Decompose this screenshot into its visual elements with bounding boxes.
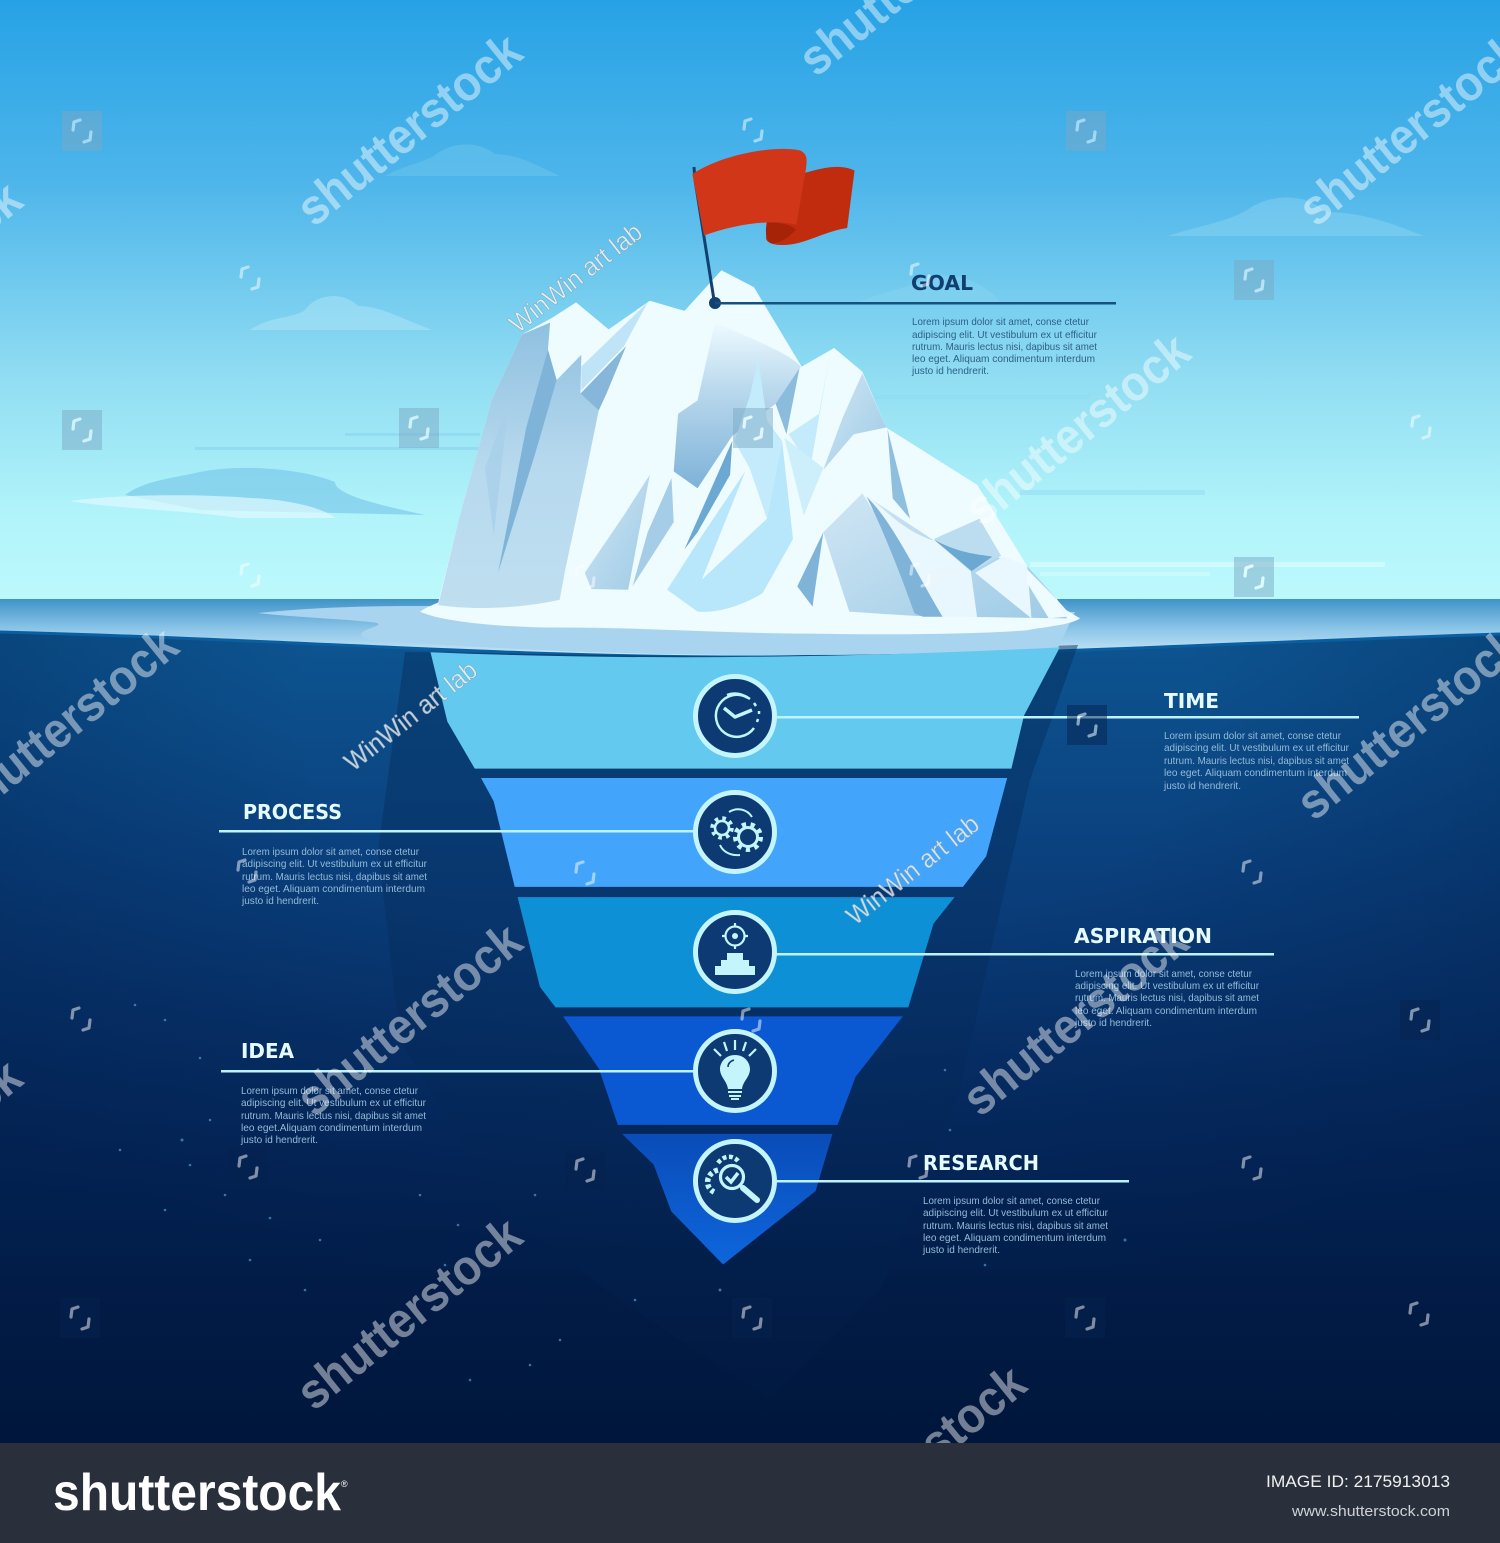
band 1 bbox=[431, 647, 1060, 769]
callout: process: Lorem ipsum dolor sit amet, conse ctetur bbox=[242, 846, 419, 858]
callout: aspiration: justo id hendrerit. bbox=[1074, 1017, 1152, 1029]
callout: goal: Lorem ipsum dolor sit amet, conse ctetur bbox=[912, 316, 1089, 328]
band 3 bbox=[518, 897, 955, 1007]
band 5 bbox=[622, 1134, 833, 1264]
callout: research: Lorem ipsum dolor sit amet, conse ctetur bbox=[923, 1195, 1100, 1207]
callout: time: leo eget. Aliquam condimentum interdum bbox=[1164, 767, 1347, 779]
callout: goal: rutrum. Mauris lectus nisi, dapibus sit amet bbox=[912, 341, 1097, 353]
underwater background bbox=[0, 632, 1500, 1443]
flag cloth bbox=[692, 149, 855, 245]
watermarks: WinWin art lab bbox=[503, 217, 648, 339]
marine particles bbox=[119, 1004, 1126, 1381]
callout: process: justo id hendrerit. bbox=[241, 895, 319, 907]
callout: idea: adipiscing elit. Ut vestibulum ex ut efficitur bbox=[241, 1097, 426, 1109]
left faces bbox=[438, 323, 599, 608]
registered mark: ® bbox=[341, 1479, 348, 1489]
callout: research: RESEARCH bbox=[923, 1151, 1039, 1175]
footer logo: shutterstock bbox=[53, 1464, 341, 1522]
sea surface bbox=[0, 599, 1500, 661]
callout: goal: leo eget. Aliquam condimentum interdum bbox=[912, 353, 1095, 365]
footer bar bbox=[0, 1443, 1500, 1543]
callout: aspiration: Lorem ipsum dolor sit amet, conse ctetur bbox=[1075, 968, 1252, 980]
callout: idea: justo id hendrerit. bbox=[240, 1134, 318, 1146]
band 4 bbox=[563, 1016, 903, 1125]
callout: time bbox=[775, 689, 1359, 792]
iceberg silhouette bbox=[420, 270, 1080, 634]
callout: research bbox=[775, 1151, 1129, 1256]
callout: idea: rutrum. Mauris lectus nisi, dapibus sit amet bbox=[241, 1110, 426, 1122]
callout: process bbox=[219, 800, 695, 907]
icon: light bulb bbox=[696, 1032, 774, 1110]
callout: aspiration bbox=[775, 924, 1274, 1029]
watermarks: shutterstock bbox=[286, 22, 532, 237]
callout: goal: justo id hendrerit. bbox=[911, 365, 989, 377]
watermarks: WinWin art lab bbox=[840, 809, 985, 931]
background: sky bbox=[0, 0, 1500, 600]
callout: research: leo eget. Aliquam condimentum interdum bbox=[923, 1232, 1106, 1244]
iceberg bbox=[420, 270, 1080, 634]
watermarks: WinWin art lab bbox=[338, 655, 483, 777]
callout: process: rutrum. Mauris lectus nisi, dapibus sit amet bbox=[242, 871, 427, 883]
watermarks: shutterstock bbox=[286, 912, 532, 1127]
watermarks: shutterstock bbox=[954, 322, 1200, 537]
central shadow face bbox=[674, 323, 801, 488]
callout: goal: GOAL bbox=[911, 271, 973, 295]
callout: idea bbox=[221, 1039, 695, 1146]
callout: research: rutrum. Mauris lectus nisi, dapibus sit amet bbox=[923, 1220, 1108, 1232]
website: www.shutterstock.com bbox=[1291, 1504, 1450, 1520]
callout: time: rutrum. Mauris lectus nisi, dapibus sit amet bbox=[1164, 755, 1349, 767]
band 2 bbox=[481, 778, 1007, 887]
watermarks: shutterstock bbox=[286, 1206, 532, 1421]
callout: process: leo eget. Aliquam condimentum interdum bbox=[242, 883, 425, 895]
callout: aspiration: leo eget. Aliquam condimentum interdum bbox=[1075, 1005, 1257, 1017]
icon: target on podium bbox=[696, 912, 774, 992]
right lower mound bbox=[823, 493, 1067, 618]
icon: gears bbox=[696, 792, 774, 872]
icon: clock bbox=[696, 676, 774, 756]
watermarks: shutterstock bbox=[952, 912, 1198, 1127]
callout: goal bbox=[709, 271, 1116, 377]
callout: aspiration: adipiscing elit. Ut vestibulum ex ut efficitur bbox=[1075, 980, 1259, 992]
callout: aspiration: rutrum. Mauris lectus nisi, dapibus sit amet bbox=[1075, 992, 1259, 1004]
callout: time: TIME bbox=[1164, 689, 1219, 713]
image id: IMAGE ID: 2175913013 bbox=[1266, 1472, 1450, 1491]
funnel bbox=[431, 647, 1060, 1264]
light blue faces bbox=[667, 441, 793, 612]
iceberg underwater shadow bbox=[378, 645, 1078, 1400]
callout: process: adipiscing elit. Ut vestibulum ex ut efficitur bbox=[242, 858, 427, 870]
callout: research: justo id hendrerit. bbox=[922, 1244, 1000, 1256]
clouds bbox=[70, 144, 1424, 576]
callout: time: Lorem ipsum dolor sit amet, conse ctetur bbox=[1164, 730, 1341, 742]
callout: research: adipiscing elit. Ut vestibulum ex ut efficitur bbox=[923, 1207, 1108, 1219]
flag bbox=[692, 149, 855, 300]
ice shelf reflection bbox=[258, 606, 1075, 655]
callout: time: justo id hendrerit. bbox=[1163, 780, 1241, 792]
callout: aspiration: ASPIRATION bbox=[1074, 924, 1212, 948]
callout: idea: leo eget.Aliquam condimentum interdum bbox=[241, 1122, 422, 1134]
callout: time: adipiscing elit. Ut vestibulum ex ut efficitur bbox=[1164, 742, 1349, 754]
callout: idea: Lorem ipsum dolor sit amet, conse ctetur bbox=[241, 1085, 418, 1097]
callout: process: PROCESS bbox=[243, 800, 342, 824]
icon: research magnifier bbox=[696, 1142, 774, 1220]
flag pole bbox=[694, 167, 714, 300]
callout: idea: IDEA bbox=[241, 1039, 295, 1063]
callout: goal: adipiscing elit. Ut vestibulum ex ut efficitur bbox=[912, 329, 1097, 341]
